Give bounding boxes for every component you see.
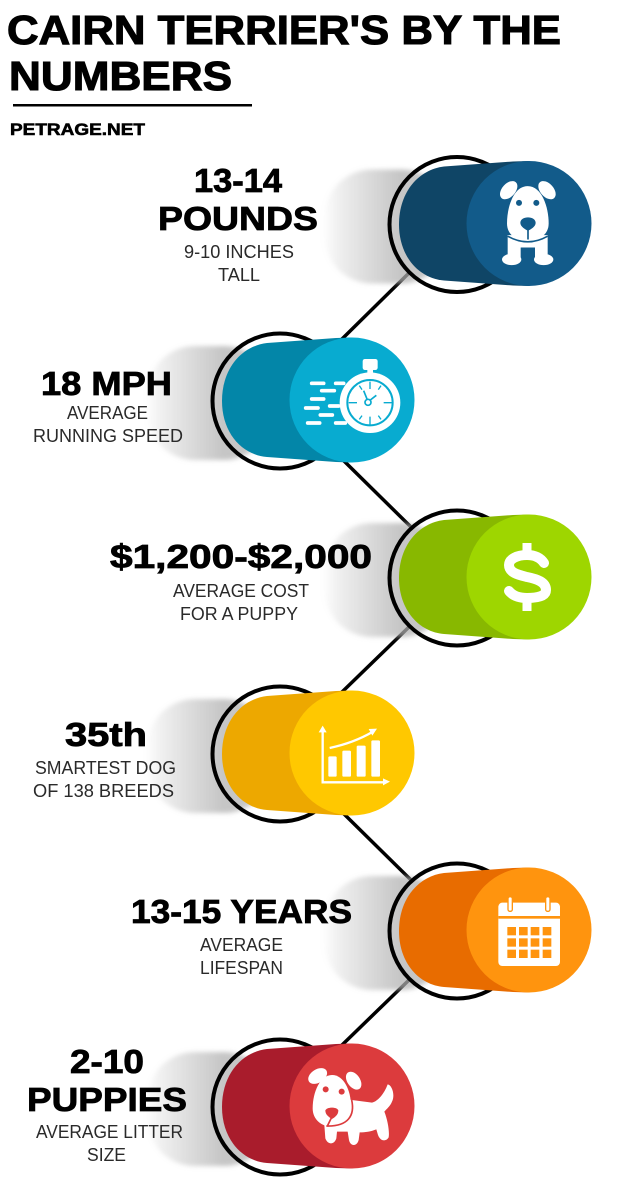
icon: rising bar chart — [319, 726, 390, 785]
title: NUMBERS — [9, 53, 232, 99]
node 6 text: SIZE — [87, 1145, 126, 1165]
node 5 text: LIFESPAN — [200, 958, 283, 978]
node 1: weight — [324, 157, 592, 292]
icon: stopwatch — [306, 359, 400, 433]
node 1 text: 13-14 — [194, 162, 283, 199]
node 3 text: FOR A PUPPY — [180, 604, 298, 624]
node 5 text: AVERAGE — [200, 935, 283, 955]
node 6 text — [27, 1043, 187, 1165]
node 6 text: PUPPIES — [27, 1081, 187, 1118]
node 6 text: 2-10 — [70, 1043, 144, 1080]
node 3 text: $1,200-$2,000 — [110, 538, 372, 575]
node 2 text: AVERAGE — [67, 403, 148, 423]
connector lines — [341, 272, 412, 1046]
node 3: cost — [324, 510, 592, 646]
node 4: intelligence — [147, 686, 414, 822]
node 3 text: AVERAGE COST — [173, 581, 309, 601]
node 3 text — [110, 538, 372, 624]
node 4 text: 35th — [65, 716, 147, 753]
title underline — [13, 104, 252, 106]
node 1 text: 9-10 INCHES — [184, 242, 294, 262]
title: CAIRN TERRIER'S BY THE — [7, 7, 561, 53]
node 2 text — [33, 365, 183, 446]
node 6: litter — [147, 1040, 414, 1174]
node 4 text: OF 138 BREEDS — [33, 781, 174, 801]
node 5: lifespan — [324, 864, 592, 998]
node 1 text: TALL — [218, 265, 260, 285]
title — [7, 7, 561, 99]
node 5 text — [131, 893, 352, 978]
node 6 text: AVERAGE LITTER — [36, 1122, 183, 1142]
node 2 text: 18 MPH — [41, 365, 172, 402]
node 4 text — [33, 716, 176, 801]
source label: PETRAGE.NET — [10, 120, 146, 139]
node 1 text — [158, 162, 318, 285]
node 1 text: POUNDS — [158, 200, 318, 237]
node 5 text: 13-15 YEARS — [131, 893, 352, 930]
node 2: speed — [147, 334, 414, 468]
icon: calendar — [498, 897, 560, 966]
icon: dog — [497, 178, 559, 265]
node 2 text: RUNNING SPEED — [33, 426, 183, 446]
node 4 text: SMARTEST DOG — [35, 758, 176, 778]
icon: puppy — [305, 1065, 393, 1145]
icon: dollar sign — [509, 543, 546, 611]
